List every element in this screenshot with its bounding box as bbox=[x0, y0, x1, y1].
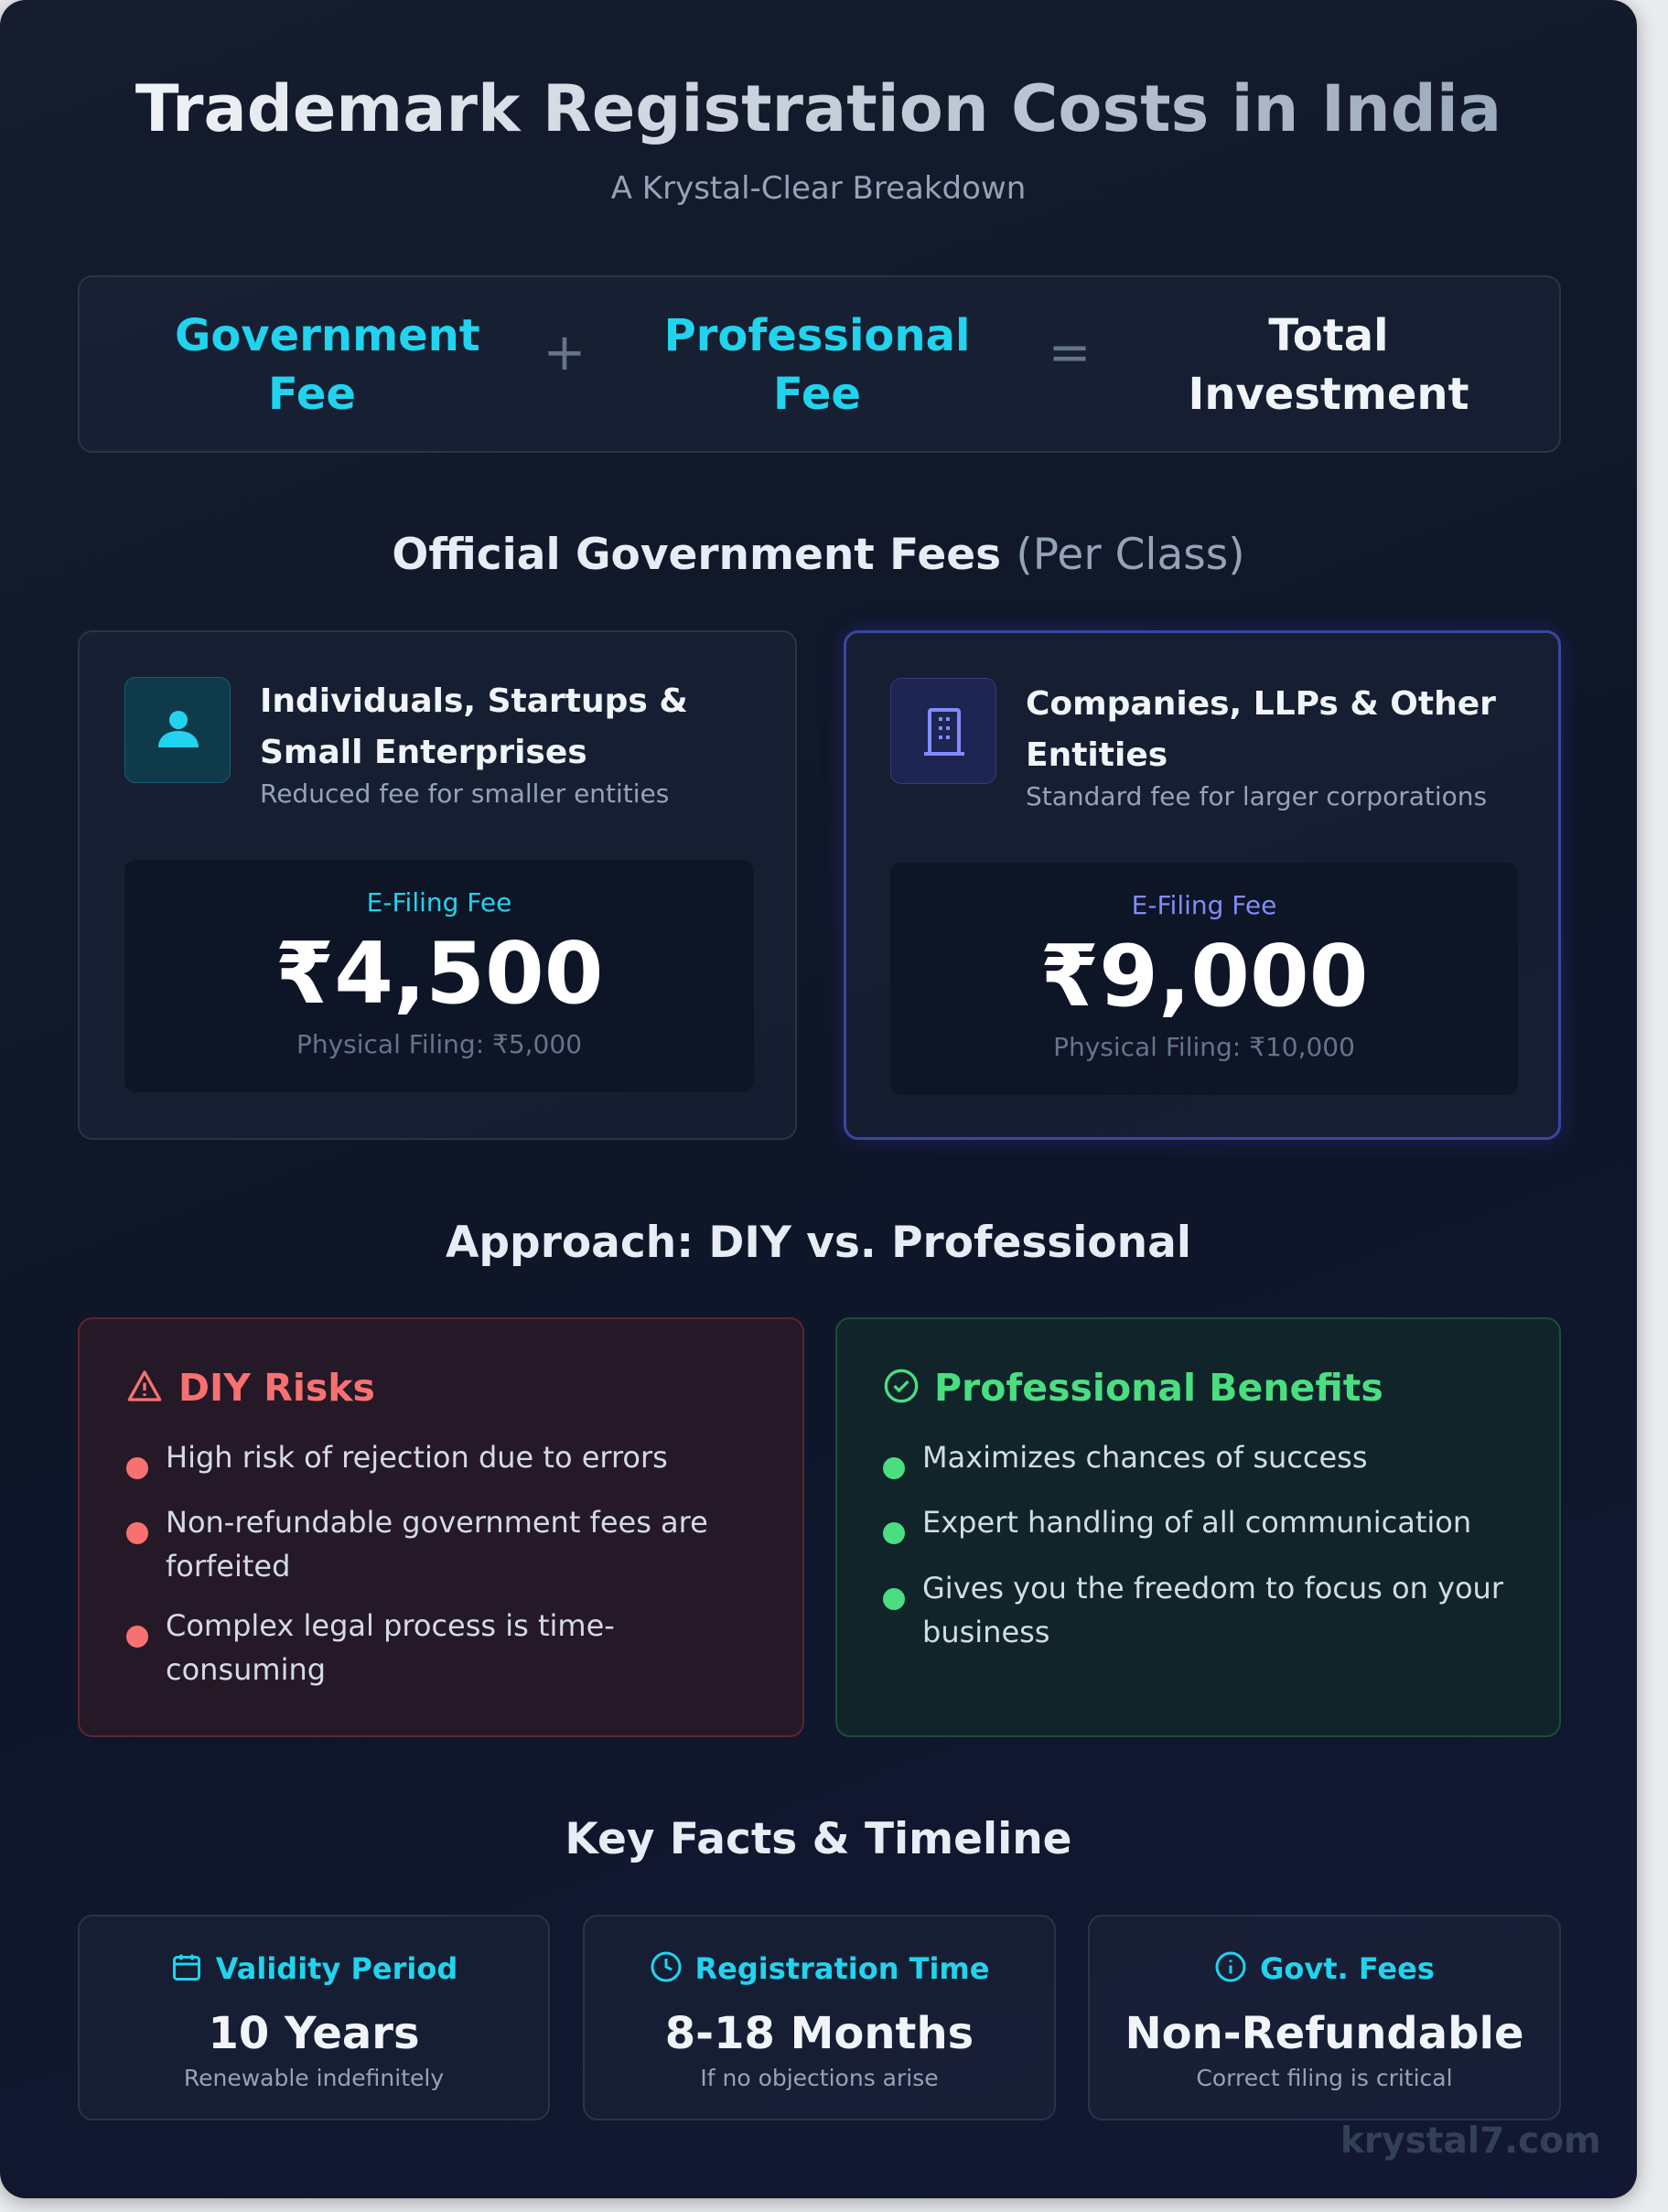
price box: Physical Filing: ₹10,000 bbox=[1053, 1032, 1355, 1062]
fact: govt fees: Govt. Fees bbox=[1260, 1951, 1435, 1986]
subtitle: Reduced fee for smaller entities bbox=[260, 778, 669, 809]
bullets bbox=[126, 1440, 708, 1687]
professional fee: Fee bbox=[773, 369, 861, 420]
bullets: Gives you the freedom to focus on your business bbox=[922, 1571, 1503, 1649]
fact: registration time bbox=[583, 1915, 1056, 2121]
icon: person bbox=[124, 677, 231, 783]
bullets: Non-refundable government fees are forfeited bbox=[166, 1505, 708, 1584]
heading: government fees: Official Government Fees (Per Class) bbox=[392, 530, 1245, 580]
title bbox=[1026, 685, 1496, 774]
subtitle: A Krystal-Clear Breakdown bbox=[611, 170, 1026, 207]
title: Individuals, Startups & bbox=[260, 682, 688, 720]
total investment: Total bbox=[1268, 310, 1389, 361]
professional fee bbox=[664, 310, 970, 420]
professional fee: Professional bbox=[664, 310, 970, 361]
fact: registration time: 8-18 Months bbox=[665, 2008, 974, 2059]
bullets: Maximizes chances of success bbox=[922, 1440, 1368, 1475]
price box: ₹4,500 bbox=[275, 924, 603, 1023]
formula panel bbox=[78, 275, 1561, 453]
government fee bbox=[175, 310, 480, 420]
price box bbox=[890, 863, 1518, 1095]
equals: = bbox=[1049, 323, 1091, 382]
fact: govt fees: Non-Refundable bbox=[1125, 2008, 1524, 2059]
plus: + bbox=[543, 323, 586, 382]
price box bbox=[124, 860, 754, 1092]
heading: key facts: Key Facts & Timeline bbox=[565, 1814, 1072, 1864]
heading: Professional Benefits bbox=[934, 1366, 1383, 1410]
heading: approach: Approach: DIY vs. Professional bbox=[446, 1218, 1191, 1268]
total investment: Investment bbox=[1188, 369, 1469, 420]
panel: companies bbox=[844, 630, 1561, 1140]
title: Trademark Registration Costs in India bbox=[135, 71, 1501, 146]
panel: DIY risks bbox=[78, 1317, 804, 1737]
bullets bbox=[883, 1440, 1504, 1649]
price box: E-Filing Fee bbox=[367, 887, 511, 918]
title: Companies, LLPs & Other bbox=[1026, 685, 1496, 723]
price box: Physical Filing: ₹5,000 bbox=[296, 1029, 582, 1059]
fact: validity bbox=[78, 1915, 550, 2121]
fact: validity: Renewable indefinitely bbox=[184, 2065, 444, 2091]
government fee: Fee bbox=[268, 369, 356, 420]
price box: ₹9,000 bbox=[1040, 927, 1368, 1025]
fact: govt fees: Correct filing is critical bbox=[1196, 2065, 1453, 2091]
panel: individuals bbox=[78, 630, 797, 1140]
bullets: Complex legal process is time-consuming bbox=[166, 1608, 615, 1687]
heading: DIY Risks bbox=[178, 1366, 375, 1410]
price box: E-Filing Fee bbox=[1132, 890, 1276, 920]
subtitle: Standard fee for larger corporations bbox=[1026, 781, 1487, 811]
government fee: Government bbox=[175, 310, 480, 361]
watermark: krystal7.com bbox=[1340, 2121, 1601, 2162]
fact: validity: 10 Years bbox=[208, 2008, 420, 2059]
title bbox=[260, 682, 688, 771]
fact: registration time: Registration Time bbox=[695, 1951, 989, 1986]
bullets: High risk of rejection due to errors bbox=[166, 1440, 668, 1475]
bullets: Expert handling of all communication bbox=[922, 1505, 1471, 1540]
panel: professional benefits bbox=[835, 1317, 1561, 1737]
fact: govt fees bbox=[1088, 1915, 1561, 2121]
title: Small Enterprises bbox=[260, 734, 587, 771]
total investment bbox=[1188, 310, 1469, 420]
icon: building bbox=[890, 678, 996, 784]
title: Entities bbox=[1026, 736, 1168, 774]
fact: validity: Validity Period bbox=[216, 1951, 457, 1986]
fact: registration time: If no objections arise bbox=[700, 2065, 939, 2091]
